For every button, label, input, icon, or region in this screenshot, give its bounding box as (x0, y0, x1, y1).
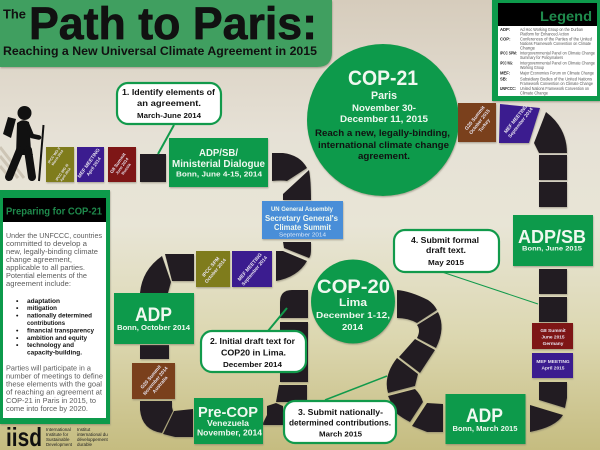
box: ADP Bonn October 2014 (114, 293, 194, 344)
sidebar bullet list (16, 298, 94, 356)
COP-20 circle: 2014 (342, 322, 363, 332)
COP-20 circle: COP-20 (317, 277, 390, 298)
sidebar bullet list: • (16, 335, 19, 342)
event: IPCC SPM October 2014 (196, 251, 230, 287)
event: MEF meeting September 2014 (232, 251, 272, 287)
sidebar closing text: of reaching an agreement at (6, 390, 102, 396)
box: Pre-COP: Pre-COP (198, 404, 258, 421)
subtitle: Reaching a New Universal Climate Agreement in 2015 (3, 46, 318, 58)
COP-21 circle (307, 44, 459, 196)
legend entries: COP: (500, 36, 510, 42)
sidebar bullet list: mitigation (27, 305, 57, 312)
sidebar intro text: new, legally-binding climate (6, 249, 98, 256)
legend entries (500, 27, 596, 96)
legend entries: Conferences of the Parties of the United (520, 36, 593, 42)
event: G8 Summit June 2014 (108, 147, 136, 182)
legend entries: Climate Change (520, 90, 549, 96)
callout 3: determined contributions. (289, 418, 391, 428)
event: G8 Summit June 2014: Russia (120, 161, 132, 176)
callout 3 (284, 401, 396, 443)
event: MEF meeting April 2014: MEF MEETING (77, 147, 102, 179)
event: G20 Summit November 2014: G20 Summit (140, 364, 163, 390)
callout 4: draft text. (426, 245, 466, 255)
box: Pre-COP (194, 398, 263, 444)
sidebar closing text: come into force by 2020. (6, 406, 88, 413)
callout 2: 2. Initial draft text for (210, 336, 296, 346)
sidebar closing text: COP-21 in Paris in 2015, to (6, 398, 96, 405)
legend entries: MEF: (500, 70, 510, 76)
callout 1: March-June 2014 (137, 113, 201, 120)
callout 1 (117, 83, 221, 124)
box: Secretary General's Climate Summit: September 2014 (279, 232, 326, 238)
connector lines (158, 125, 538, 400)
event: MEF meeting April 2015: April 2015 (542, 366, 565, 372)
COP-21 circle: Reach a new, legally-binding, (315, 128, 450, 139)
sidebar bullet list: • (16, 305, 19, 312)
legend entries: United Nations Framework Convention on (520, 86, 590, 91)
box: Pre-COP: November, 2014 (197, 428, 263, 438)
callout 2: COP20 in Lima. (221, 348, 286, 358)
callout 4: May 2015 (428, 260, 464, 267)
event: G20 Summit November 2014: November 2014 (142, 365, 170, 397)
COP-20 circle: December 1-12, (316, 310, 390, 320)
IISD logo: Sustainable (46, 437, 70, 442)
sidebar: Preparing for COP-21 (0, 190, 110, 424)
event: MEF meeting September 2014: September 2014 (241, 255, 269, 287)
sidebar intro text (6, 233, 103, 288)
event: MEF meeting April 2015: MEF MEETING (536, 359, 570, 365)
header (0, 0, 332, 67)
IISD logo: Institute for (46, 432, 69, 437)
event: G8 Summit June 2015: G8 Summit (540, 328, 566, 334)
sidebar bullet list: nationally determined (27, 312, 92, 320)
box: Secretary General's Climate Summit: Secretary General's (265, 213, 338, 223)
callout 4 (394, 230, 499, 272)
event: G8 Summit June 2015 (532, 323, 573, 349)
box: ADP Bonn March 2015 (446, 394, 526, 444)
event: G20 Summit October 2015 (458, 103, 497, 142)
sidebar closing text: Parties will participate in a (6, 366, 91, 372)
box: Secretary General's Climate Summit: Climate Summit (274, 222, 331, 232)
event: IPCC WG II and III: March 2014 (51, 149, 64, 166)
COP-21 circle: November 30- (352, 103, 416, 113)
event: G8 Summit June 2015: June 2015 (541, 334, 565, 340)
box: ADP Bonn March 2015: Bonn, March 2015 (452, 426, 518, 433)
COP-21 circle: COP-21 (348, 67, 418, 90)
event: G20 Summit October 2015: Turkey (478, 118, 492, 134)
box: ADP Bonn October 2014: Bonn, October 2014 (117, 323, 191, 332)
event: IPCC WG II and III (46, 147, 74, 184)
box: ADP/SB Bonn June 2015 (513, 215, 593, 266)
COP-21 circle: international climate change (318, 140, 449, 151)
sidebar intro text: agreement include: (6, 281, 71, 288)
callout 2: December 2014 (223, 362, 282, 369)
legend entries: Nations Framework Convention on Climate (520, 41, 592, 46)
sidebar bullet list: • (16, 298, 19, 305)
sidebar bullet list: contributions (27, 320, 65, 327)
sidebar bullet list: capacity-building. (27, 350, 82, 356)
sidebar intro text: Under the UNFCCC, countries (6, 233, 103, 240)
box: ADP/SB/Ministerial Dialogue (169, 138, 268, 187)
box: ADP/SB/Ministerial Dialogue: Bonn, June 4-15, 2014 (176, 170, 263, 178)
COP-21 circle: agreement. (358, 151, 410, 162)
IISD logo: durable (77, 442, 93, 447)
box: ADP/SB Bonn June 2015: Bonn, June 2015 (522, 246, 582, 252)
box: ADP Bonn October 2014: ADP (135, 305, 172, 326)
event: MEF meeting September 2014: MEF MEETING (237, 252, 264, 283)
legend entries: ADP: (500, 27, 510, 32)
sidebar bullet list: financial transparency (27, 328, 94, 334)
IISD logo: Institut (77, 427, 91, 432)
box: ADP/SB Bonn June 2015: ADP/SB (518, 227, 586, 247)
title: the: The (3, 6, 26, 22)
legend heading: Legend (540, 8, 592, 24)
event: G8 Summit June 2015: Germany (543, 341, 564, 347)
event: G20 Summit October 2015: October 2015 (468, 108, 492, 136)
legend entries: Summary for Policymakers (520, 55, 563, 60)
sidebar bullet list: adaptation (27, 298, 60, 305)
COP-20 circle: Lima (339, 297, 368, 309)
sidebar intro text: change agreement, (6, 257, 72, 264)
legend entries: Subsidiary Bodies of the United Nations (520, 76, 592, 82)
legend entries: Platform for Enhanced Action (520, 32, 570, 36)
callout 2 (201, 331, 306, 372)
hiker (0, 106, 44, 181)
sidebar bullet list: • (16, 312, 19, 320)
legend entries: Working Group (520, 65, 545, 70)
IISD logo: international du (77, 432, 108, 437)
event: MEF meeting September 2014: MEF MEETING (503, 104, 529, 135)
box: Secretary General's Climate Summit (262, 201, 343, 239)
sidebar bullet list: • (16, 328, 19, 334)
road: dark path segments (140, 112, 567, 437)
legend entries: SB: (500, 76, 507, 82)
event: IPCC SPM October 2014: October 2014 (204, 257, 228, 285)
event: G20 Summit October 2015: G20 Summit (464, 105, 487, 132)
sidebar heading: Preparing for COP-21 (6, 206, 102, 218)
legend entries: IPCC SPM: (500, 50, 517, 56)
COP-20 circle (311, 260, 395, 344)
box: ADP/SB/Ministerial Dialogue: ADP/SB/ (199, 147, 238, 159)
sidebar bullet list: ambition and equity (27, 335, 87, 342)
callout 1: 1. Identify elements of (122, 87, 215, 97)
event: G8 Summit June 2014: G8 Summit (109, 152, 127, 174)
sidebar intro text: Potential elements of the (6, 273, 87, 280)
IISD logo: développement (77, 437, 109, 442)
legend entries: Change (520, 46, 536, 50)
sidebar intro text: applicable to all parties. (6, 265, 85, 272)
sidebar closing text: number of meetings to define (6, 374, 103, 380)
event: G8 Summit June 2014: June 2014 (114, 156, 130, 175)
legend (492, 0, 600, 101)
event: IPCC SPM October 2014: IPCC SPM (201, 256, 221, 279)
sidebar closing text: these elements with the goal (6, 382, 102, 388)
box: ADP/SB/Ministerial Dialogue: Ministerial Dialogue (172, 158, 265, 170)
IISD logo: Development (46, 442, 73, 447)
callout 1: an agreement. (137, 98, 201, 108)
event: IPCC WG II and III: April 2014 (59, 167, 72, 182)
IISD logo (6, 422, 109, 450)
sidebar bullet list: technology and (27, 342, 74, 349)
event: G20 Summit November 2014: Australia (152, 375, 170, 395)
callout 3: March 2015 (319, 432, 362, 438)
event: G20 Summit November 2014 (132, 362, 175, 401)
legend entries: IPCC WG: (500, 60, 513, 66)
sidebar intro text: committed to develop a (6, 241, 87, 248)
box: ADP Bonn March 2015: ADP (466, 406, 503, 427)
callout 4: 4. Submit formal (411, 235, 479, 245)
event: MEF meeting April 2015 (532, 353, 573, 378)
box: Secretary General's Climate Summit: UN General Assembly (271, 207, 334, 213)
event: MEF meeting April 2014: April 2014 (85, 156, 102, 177)
legend entries: UNFCCC: (500, 86, 516, 91)
callout 3: 3. Submit nationally- (298, 407, 383, 417)
legend entries: Framework Convention on Climate Change (520, 81, 594, 86)
box: Pre-COP: Venezuela (207, 419, 250, 428)
event: IPCC WG II and III: IPCC WG II (47, 147, 61, 164)
event: IPCC WG II and III: IPCC WG III (55, 163, 69, 182)
COP-21 circle: Paris (371, 90, 397, 102)
IISD logo: International (46, 427, 71, 432)
event: MEF meeting September 2014 (499, 103, 540, 143)
legend entries: Ad Hoc Working Group on the Durban (520, 27, 584, 32)
event: MEF meeting September 2014: September 2014 (507, 106, 535, 139)
sidebar closing text (6, 366, 103, 413)
sidebar bullet list: • (16, 342, 19, 349)
COP-21 circle: December 11, 2015 (340, 114, 428, 124)
